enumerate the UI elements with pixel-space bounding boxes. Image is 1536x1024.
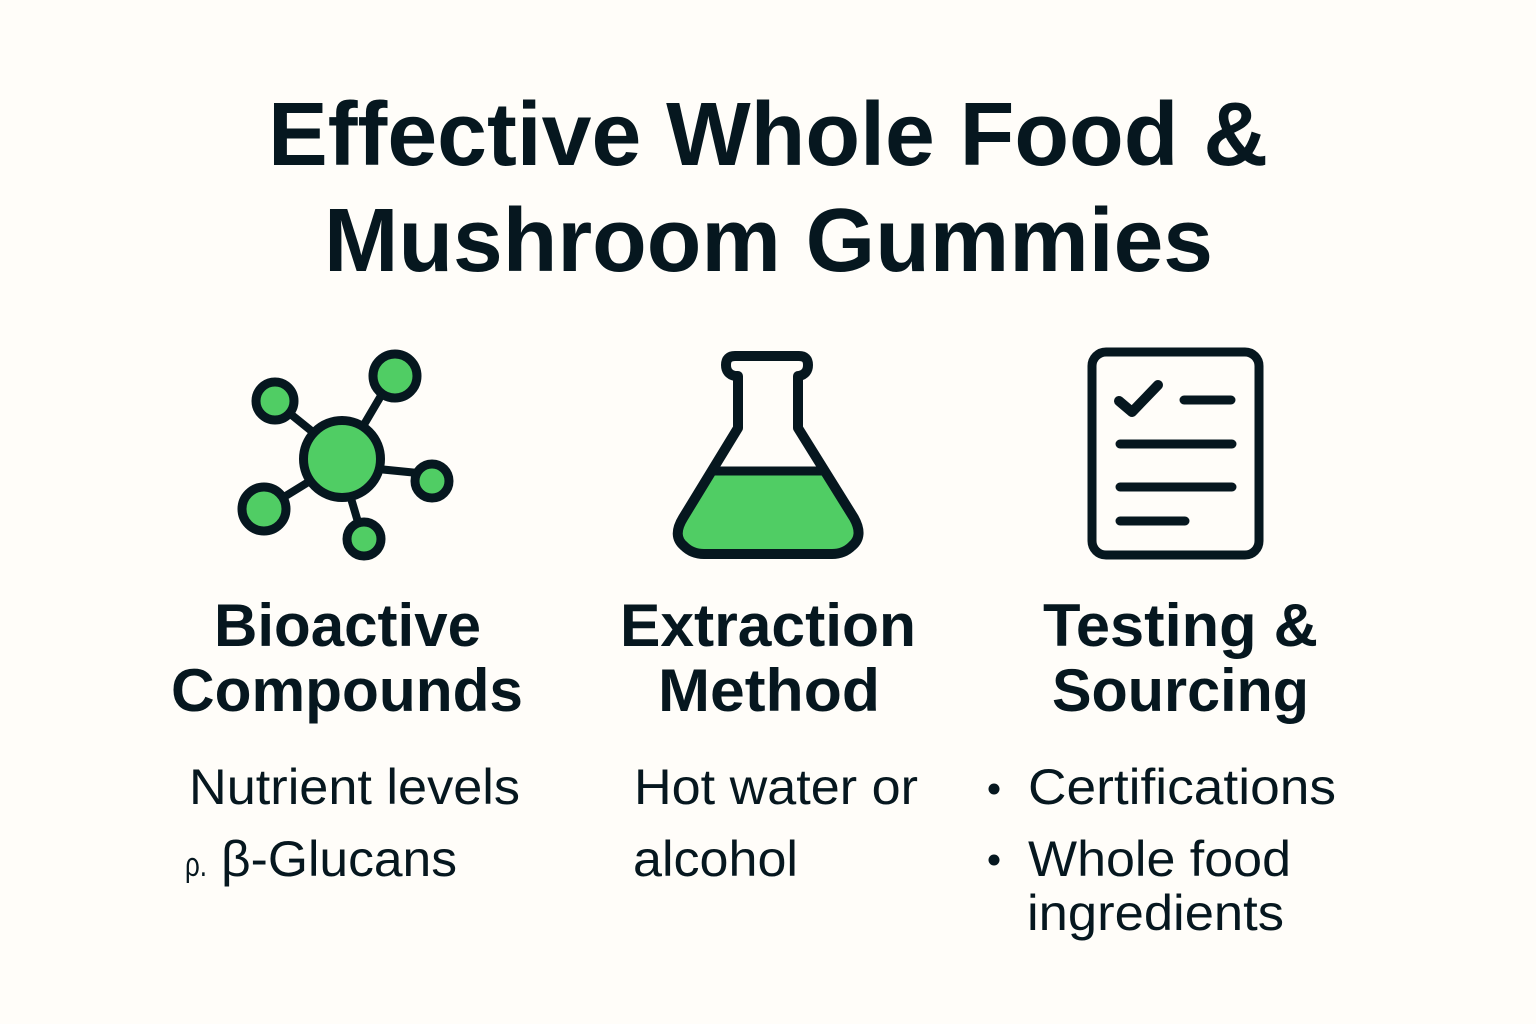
text: testing bullet list — [988, 759, 1336, 941]
icon: molecule — [242, 354, 449, 556]
heading: bioactive compounds — [171, 592, 523, 724]
text: extraction details: alcohol — [633, 831, 798, 887]
panel: extraction method — [620, 356, 918, 887]
heading: extraction method: Extraction — [620, 592, 916, 659]
text: testing bullet list: ingredients — [1027, 885, 1284, 941]
title — [268, 85, 1268, 291]
text: testing bullet list: Whole food — [1028, 831, 1291, 887]
text: bioactive details — [185, 759, 520, 887]
heading: extraction method — [620, 592, 916, 724]
heading: testing and sourcing: Testing & — [1043, 592, 1318, 659]
text: bioactive details: β-Glucans — [221, 831, 457, 887]
heading: extraction method: Method — [658, 657, 880, 724]
panel: bioactive compounds — [171, 354, 523, 887]
icon: checklist document — [1092, 352, 1259, 555]
heading: testing and sourcing — [1043, 592, 1318, 724]
text: bioactive details: Nutrient levels — [189, 759, 520, 815]
heading: testing and sourcing: Sourcing — [1052, 657, 1309, 724]
text: bioactive details: ρ. — [185, 846, 207, 884]
panel: testing and sourcing — [988, 352, 1336, 941]
heading: bioactive compounds: Bioactive — [214, 592, 481, 659]
text: testing bullet list: Certifications — [1028, 759, 1336, 815]
heading: bioactive compounds: Compounds — [171, 657, 523, 724]
title: Effective Whole Food & — [268, 85, 1268, 185]
icon: flask — [678, 356, 859, 554]
text: extraction details: Hot water or — [634, 759, 918, 815]
text: extraction details — [633, 759, 918, 887]
title: Mushroom Gummies — [324, 191, 1213, 291]
